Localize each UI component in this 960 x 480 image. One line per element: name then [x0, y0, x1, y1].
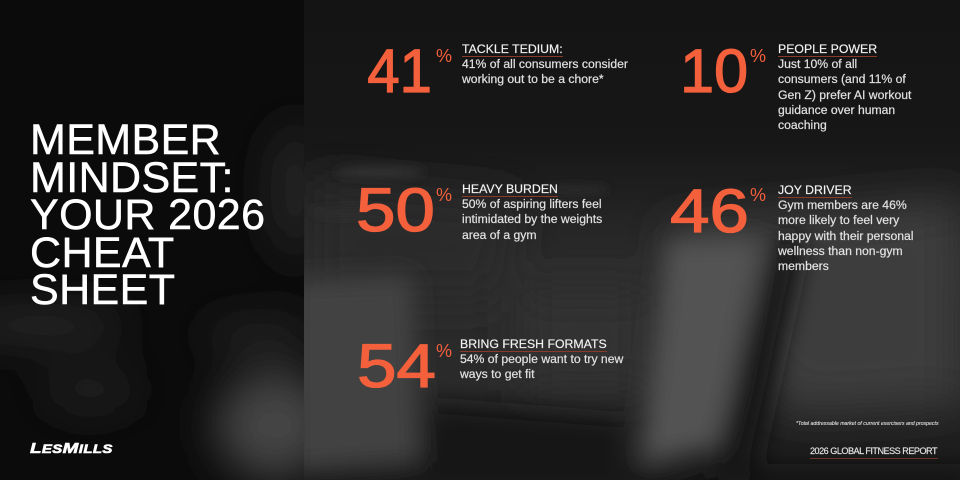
logo: Les Mills wordmark: LESMILLS: [30, 441, 113, 457]
stat text: HEAVY BURDEN: [462, 182, 558, 196]
stat: 50% heavy burden: [356, 176, 602, 244]
stat text: working out to be a chore*: [462, 72, 604, 86]
stat: 41% tackle tedium: [368, 37, 628, 105]
stat text: 41% of all consumers consider: [462, 57, 628, 71]
stat text: BRING FRESH FORMATS: [460, 337, 607, 351]
stat text: more likely to feel very: [778, 213, 899, 227]
percent sign: %: [436, 46, 452, 66]
title: [30, 116, 265, 314]
stat text: JOY DRIVER: [778, 183, 852, 197]
stat text: [778, 42, 912, 132]
stat text: [778, 183, 914, 273]
stat number 54: 54: [357, 332, 436, 400]
stat text: guidance over human: [778, 103, 895, 117]
stat number 50: 50: [356, 176, 435, 244]
title: MINDSET:: [30, 154, 234, 202]
stat: 54% bring fresh formats: [357, 332, 624, 400]
stat text: Gen Z) prefer AI workout: [778, 88, 911, 102]
percent sign: %: [436, 185, 452, 205]
stat text: happy with their personal: [778, 229, 914, 243]
stat text: Gym members are 46%: [778, 198, 907, 212]
left panel, darker with sharp edge at x=304: [0, 0, 304, 480]
stat text: PEOPLE POWER: [778, 42, 877, 56]
title: MEMBER: [30, 116, 221, 164]
stat text: TACKLE TEDIUM:: [462, 42, 563, 56]
title: SHEET: [30, 266, 175, 314]
stat text: area of a gym: [462, 228, 537, 242]
stat text: 54% of people want to try new: [460, 352, 623, 366]
stat: 10% people power: [680, 37, 912, 132]
stat text: [462, 182, 602, 242]
stat text: consumers (and 11% of: [778, 72, 906, 86]
stat text: Just 10% of all: [778, 57, 857, 71]
report label: 2026 GLOBAL FITNESS REPORT: [810, 446, 937, 456]
stat number 10: 10: [680, 37, 748, 105]
stat text: coaching: [778, 118, 827, 132]
title: YOUR 2026: [30, 191, 265, 239]
stat number 41: 41: [368, 37, 432, 105]
stat text: [462, 42, 628, 86]
stat: 46% joy driver: [670, 177, 914, 273]
footnote: *Total addressable market of current exercisers and prospects: [796, 421, 939, 427]
percent sign: %: [750, 185, 766, 205]
stat number 46: 46: [670, 177, 749, 245]
percent sign: %: [750, 46, 766, 66]
title: CHEAT: [30, 229, 175, 277]
stat text: wellness than non-gym: [778, 244, 903, 258]
stat text: intimidated by the weights: [462, 212, 602, 226]
stat text: ways to get fit: [460, 367, 535, 381]
stat text: 50% of aspiring lifters feel: [462, 197, 602, 211]
stat text: members: [778, 259, 829, 273]
percent sign: %: [436, 341, 452, 361]
stat text: [460, 337, 624, 381]
